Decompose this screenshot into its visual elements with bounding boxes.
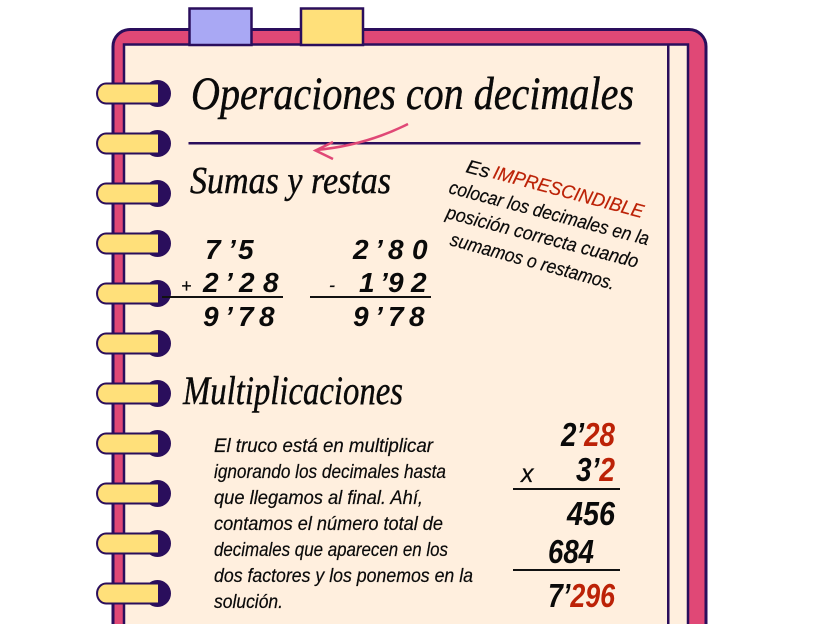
subtraction calculation: -: [329, 275, 335, 295]
sum calculation: 7’5: [205, 234, 254, 265]
sum calculation: [162, 234, 283, 332]
title: Operaciones con decimales: [191, 68, 634, 120]
text block: multiplication trick: contamos el número total de: [214, 514, 443, 535]
tab: lavender: [190, 8, 252, 45]
subtraction calculation: [310, 234, 431, 332]
tab: yellow: [301, 8, 363, 45]
callout: decimal position note: colocar los decimales en la: [447, 178, 651, 250]
multiplication calculation: 3’2: [576, 451, 616, 488]
arrow: pink pointer: [316, 124, 408, 159]
page margin line: [667, 45, 670, 624]
text block: multiplication trick: que llegamos al final. Ahí,: [214, 488, 423, 509]
callout: decimal position note: IMPRESCINDIBLE: [491, 163, 646, 223]
title underline: [188, 142, 640, 144]
spiral binding rings: [97, 80, 171, 607]
callout: decimal position note: Es: [464, 157, 493, 183]
multiplication calculation: 7’296: [548, 577, 616, 614]
subtraction calculation: 2’80: [352, 234, 428, 265]
heading: Multiplicaciones: Multiplicaciones: [182, 368, 403, 413]
text block: multiplication trick: solución.: [214, 592, 283, 613]
heading: Sumas y restas: Sumas y restas: [190, 160, 391, 202]
text block: multiplication trick: [214, 436, 473, 613]
text block: multiplication trick: dos factores y los ponemos en la: [214, 566, 473, 587]
text block: multiplication trick: El truco está en multiplicar: [214, 436, 434, 457]
multiplication calculation: 684: [548, 533, 594, 570]
callout: decimal position note: [443, 157, 651, 295]
text block: multiplication trick: decimales que aparecen en los: [214, 540, 448, 561]
sum calculation: 9’78: [203, 301, 275, 332]
callout: decimal position note: posición correcta cuando: [443, 202, 641, 273]
multiplication calculation: 2’28: [560, 416, 616, 453]
sum calculation: 2’28: [202, 267, 279, 298]
multiplication calculation: 456: [566, 495, 616, 532]
text block: multiplication trick: ignorando los decimales hasta: [214, 462, 446, 483]
multiplication calculation: x: [520, 460, 535, 488]
multiplication calculation: [513, 416, 620, 614]
subtraction calculation: 9’78: [353, 301, 425, 332]
subtraction calculation: 1’92: [359, 267, 427, 298]
sum calculation: +: [181, 276, 192, 296]
panel: notebook cover: [113, 30, 706, 624]
callout: decimal position note: sumamos o restamos.: [448, 230, 617, 295]
notebook page: [124, 44, 688, 624]
